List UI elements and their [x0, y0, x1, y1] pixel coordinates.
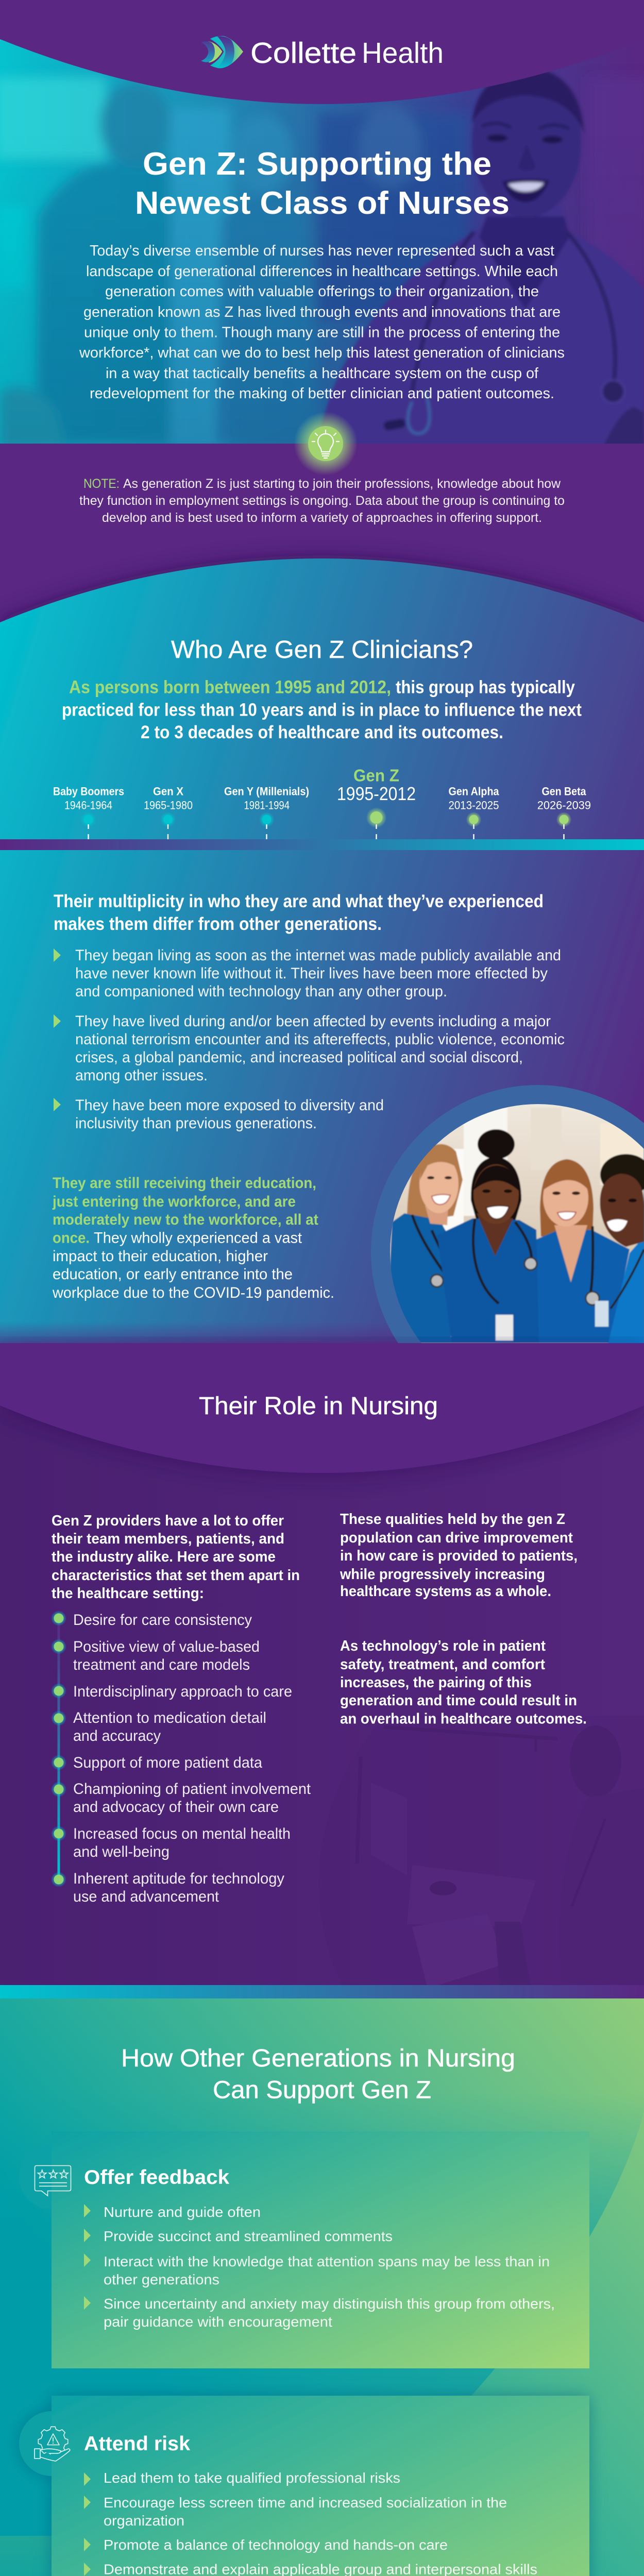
background shape [0, 2092, 644, 2536]
list text: Support of more patient data [73, 1754, 262, 1771]
faded photo: nurse at computer [355, 1725, 621, 1985]
note text: As generation Z is just starting to join their professions, knowledge about how [123, 477, 561, 491]
timeline item: Gen Beta: Gen Beta [542, 785, 586, 798]
note text [79, 477, 565, 525]
icon: gear with warning and hand [35, 2427, 70, 2461]
list text: and well-being [73, 1843, 170, 1860]
card bullets: Provide succinct and streamlined comments [104, 2228, 393, 2244]
list text: Inherent aptitude for technology [73, 1870, 284, 1887]
icon: light bulb [294, 412, 358, 476]
heading: Can Support Gen Z [213, 2077, 431, 2104]
card title: Offer feedback [84, 2166, 229, 2189]
card bullets: Lead them to take qualified professional risks [104, 2470, 400, 2486]
subtext paragraph: impact to their education, higher [53, 1248, 268, 1265]
lead paragraph: practiced for less than 10 years and is in place to influence the next [62, 700, 582, 720]
heading: How Other Generations in Nursing [121, 2045, 515, 2072]
timeline item: Gen Z [337, 766, 416, 839]
subtext paragraph: just entering the workforce, and are [52, 1193, 296, 1210]
note text: develop and is best used to inform a variety of approaches in offering support. [102, 511, 542, 525]
timeline item: Gen X: 1965-1980 [144, 799, 193, 812]
intro paragraph [79, 243, 565, 402]
right paragraph: technology: increases, the pairing of this [340, 1674, 532, 1691]
left intro paragraph: their team members, patients, and [52, 1531, 284, 1547]
card bullets: other generations [104, 2272, 219, 2287]
header shape [0, 1343, 644, 1473]
card: attend risk [19, 2396, 589, 2576]
list markers [51, 1611, 66, 1887]
card bullets: Interact with the knowledge that attention spans may be less than in [104, 2253, 550, 2269]
subtext paragraph: They wholly experienced a vast [94, 1229, 302, 1247]
list text [73, 1612, 311, 1905]
bullet: events: crises, a global pandemic, and increased political and social discord, [75, 1049, 523, 1066]
subtext paragraph: once. [53, 1229, 90, 1247]
timeline item: Gen Z: 1995-2012 [337, 783, 416, 804]
right paragraph: qualities: population can drive improvement [340, 1530, 573, 1546]
intro paragraph: unique only to them. Though many are still in the process of entering the [84, 325, 560, 341]
timeline item: Gen Y: Gen Y (Millenials) [224, 785, 309, 798]
panel: their role in nursing [0, 1343, 644, 1989]
icon: rating speech bubble [35, 2166, 71, 2196]
timeline item: Baby Boomers: Baby Boomers [53, 785, 124, 798]
timeline item: Gen X: Gen X [153, 785, 183, 798]
nurse 4 [600, 1154, 644, 1195]
list text: treatment and care models [73, 1656, 250, 1673]
intro paragraph: Today’s diverse ensemble of nurses has never represented such a vast [90, 243, 554, 259]
panel: how other generations can support gen z [0, 1998, 644, 2576]
card bullets: pair guidance with encouragement [104, 2314, 332, 2330]
title [135, 146, 510, 221]
right paragraph: technology: an overhaul in healthcare outcomes. [340, 1710, 587, 1727]
card bullets: Encourage less screen time and increased socialization in the [104, 2495, 507, 2511]
intro paragraph: landscape of generational differences in healthcare settings. While each [86, 263, 558, 280]
list text: Positive view of value-based [73, 1638, 260, 1655]
bullet: internet: and companioned with technology than any other group. [75, 983, 447, 1000]
intro paragraph: redevelopment for the making of better clinician and patient outcomes. [90, 385, 554, 402]
subheading [54, 891, 544, 934]
note text: NOTE: [83, 477, 120, 491]
timeline item: Gen Z: Gen Z [353, 766, 399, 785]
card bullets [84, 2204, 555, 2330]
card: offer feedback [19, 2131, 589, 2368]
timeline item: Gen Alpha [448, 785, 499, 839]
intro paragraph: in a way that tactically benefits a healthcare system on the cusp of [106, 365, 539, 382]
timeline item: Gen X [144, 785, 193, 839]
timeline item: Baby Boomers [53, 785, 124, 839]
bullet: internet: They began living as soon as the internet was made publicly available and [75, 947, 561, 964]
nurse 1 [407, 1144, 463, 1222]
nurse 2 [478, 1129, 515, 1159]
card background [19, 2396, 589, 2576]
subtext paragraph [52, 1175, 334, 1301]
right paragraph: technology: safety, treatment, and comfort [340, 1656, 545, 1673]
right paragraph: technology: generation and time could result in [340, 1692, 577, 1709]
bullet: diversity: They have been more exposed to diversity and [75, 1097, 384, 1114]
logo: Collette Health [201, 36, 444, 70]
intro paragraph: generation known as Z has lived through events and innovations that are [83, 304, 561, 320]
logo: Collette Health: Health [362, 37, 444, 70]
right paragraph: qualities: while progressively increasing [340, 1566, 545, 1583]
left intro paragraph: the industry alike. Here are some [52, 1549, 276, 1565]
list text: Championing of patient involvement [73, 1781, 311, 1798]
heading [121, 2045, 515, 2104]
title: Newest Class of Nurses [135, 185, 510, 221]
bullet: internet: have never known life without it. Their lives have been more effected by [75, 965, 548, 982]
timeline item: Gen Y [224, 785, 309, 839]
right paragraph: technology [340, 1638, 587, 1727]
list connector line [58, 1618, 60, 1879]
list text: and accuracy [73, 1727, 161, 1744]
bullet: diversity: inclusivity than previous generations. [75, 1115, 317, 1132]
bullet: diversity [54, 1097, 384, 1132]
right paragraph: qualities: in how care is provided to patients, [340, 1548, 578, 1564]
icon: logo mark [201, 36, 243, 68]
nurse 3 [540, 1159, 594, 1236]
subtext paragraph: education, or early entrance into the [53, 1266, 293, 1283]
section background [0, 1343, 644, 1985]
page background [0, 0, 644, 670]
list text: Increased focus on mental health [73, 1825, 291, 1842]
timeline item: Baby Boomers: 1946-1964 [64, 799, 112, 812]
left intro paragraph: the healthcare setting: [52, 1585, 204, 1602]
left intro paragraph: characteristics that set them apart in [52, 1567, 300, 1584]
intro paragraph: generation comes with valuable offerings to their organization, the [105, 283, 539, 300]
right paragraph: qualities: These qualities held by the gen Z [340, 1511, 565, 1528]
right paragraph: technology: As technology’s role in patient [340, 1638, 546, 1654]
characteristics list [51, 1611, 311, 1905]
list text: Attention to medication detail [73, 1709, 266, 1726]
bullet: internet [54, 947, 561, 1000]
lead paragraph: this group has typically [396, 677, 575, 698]
photo: four nurses in a circle [371, 1085, 644, 1343]
left intro paragraph: Gen Z providers have a lot to offer [52, 1513, 284, 1529]
list text: use and advancement [73, 1888, 219, 1905]
timeline item: Gen Beta: 2026-2039 [537, 799, 591, 812]
logo: Collette Health: Collette [250, 37, 357, 70]
right paragraph: qualities [340, 1511, 578, 1600]
timeline item: Gen Alpha: Gen Alpha [448, 785, 499, 798]
timeline of generations [0, 766, 644, 850]
card bullets: Nurture and guide often [104, 2204, 261, 2220]
bullet list [54, 947, 565, 1132]
divider band [0, 1985, 644, 1998]
list text: and advocacy of their own care [73, 1799, 279, 1816]
left intro paragraph [52, 1513, 300, 1602]
subtext paragraph: moderately new to the workforce, all at [53, 1211, 318, 1228]
section background arch [0, 558, 644, 1343]
card background [19, 2131, 589, 2368]
card bullets: Since uncertainty and anxiety may distinguish this group from others, [104, 2296, 555, 2312]
bullet: events: among other issues. [75, 1067, 208, 1084]
heading: Their Role in Nursing [199, 1393, 438, 1420]
section background [0, 1998, 644, 2576]
note text: they function in employment settings is ongoing. Data about the group is continuing to [79, 494, 565, 508]
list text: Desire for care consistency [73, 1612, 252, 1629]
heading: Who Are Gen Z Clinicians? [171, 636, 473, 664]
subheading: makes them differ from other generations. [54, 914, 382, 934]
subtext paragraph: workplace due to the COVID-19 pandemic. [52, 1284, 334, 1301]
subtext paragraph: They are still receiving their education, [53, 1175, 316, 1192]
bottom fade [0, 1321, 644, 1343]
background patch [0, 2536, 52, 2576]
card bullets: organization [104, 2513, 184, 2529]
timeline item: Gen Beta [537, 785, 591, 839]
right paragraph: qualities: healthcare systems as a whole. [340, 1583, 551, 1600]
card bullets: Promote a balance of technology and hands-on care [104, 2537, 448, 2553]
timeline band [0, 839, 644, 850]
list text: Interdisciplinary approach to care [73, 1683, 292, 1700]
bullet: events: national terrorism encounter and its aftereffects, public violence, economic [75, 1031, 565, 1048]
lead paragraph: 2 to 3 decades of healthcare and its outcomes. [141, 722, 503, 742]
lead paragraph: As persons born between 1995 and 2012, [69, 677, 391, 698]
panel: hero [0, 0, 644, 525]
card title: Attend risk [84, 2433, 190, 2455]
card bullets [84, 2470, 537, 2576]
intro paragraph: workforce*, what can we do to best help this latest generation of clinicians [79, 345, 565, 361]
bullet: events [54, 1013, 565, 1084]
title: Gen Z: Supporting the [143, 146, 492, 182]
timeline item: Gen Y: 1981-1994 [244, 799, 290, 812]
bullet: events: They have lived during and/or been affected by events including a major [75, 1013, 551, 1030]
subheading: Their multiplicity in who they are and what they’ve experienced [54, 891, 544, 911]
lead paragraph [62, 677, 582, 742]
panel: who are gen z clinicians [0, 558, 644, 1419]
hero photo: duotone nurses [0, 0, 644, 448]
timeline item: Gen Alpha: 2013-2025 [448, 799, 499, 812]
